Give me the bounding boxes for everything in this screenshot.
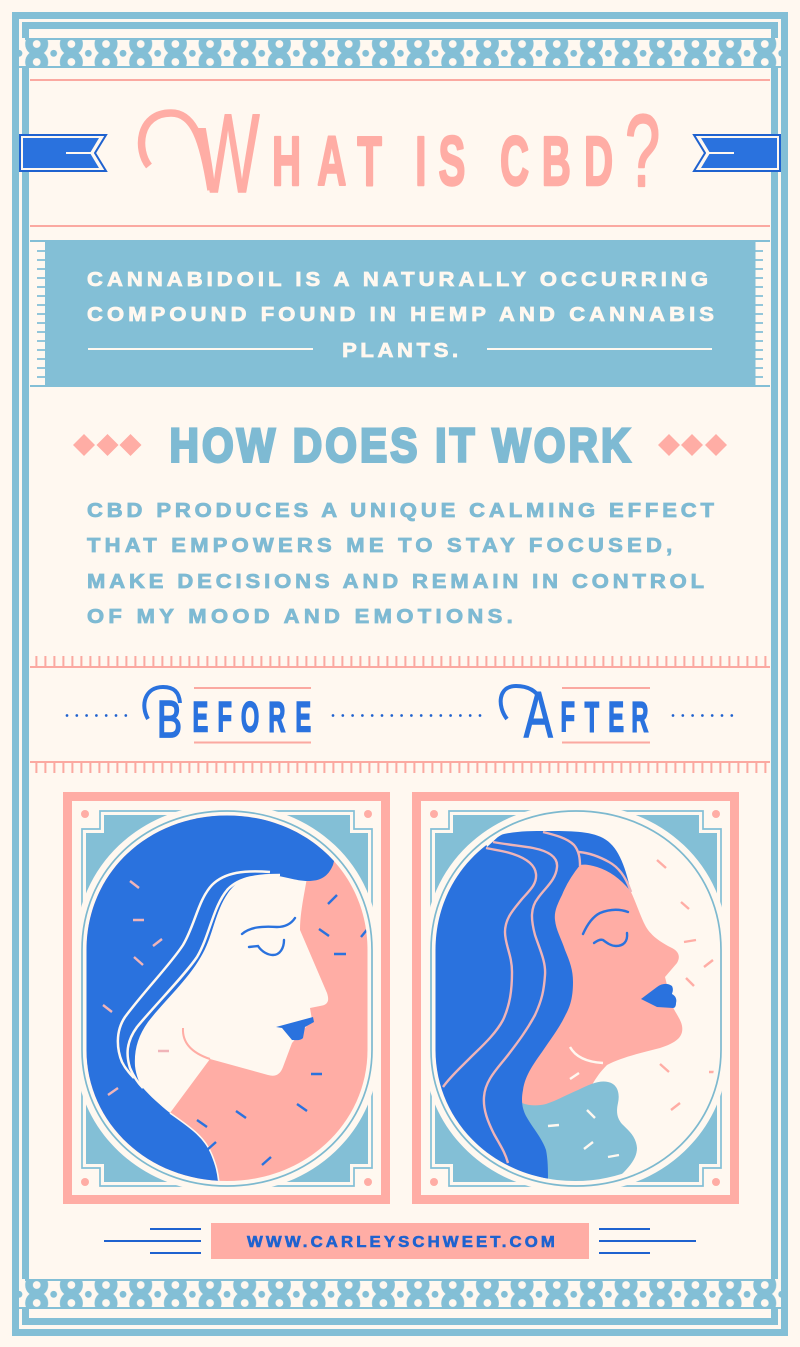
ribbon: left xyxy=(20,135,106,171)
definition text xyxy=(87,269,714,362)
definition text: PLANTS. xyxy=(342,340,458,362)
illustration: woman profile calm xyxy=(436,831,714,1181)
body text: CBD PRODUCES A UNIQUE CALMING EFFECT xyxy=(87,500,714,522)
heading: before: EFORE xyxy=(193,694,311,741)
definition text: CANNABIDOIL IS A NATURALLY OCCURRING xyxy=(87,269,708,291)
bottom patterned band xyxy=(19,1279,781,1309)
dotted lines xyxy=(67,714,734,717)
lines: left of url xyxy=(104,1229,201,1253)
diamonds: left xyxy=(73,434,142,456)
heading: before: B xyxy=(157,690,182,748)
body text: THAT EMPOWERS ME TO STAY FOCUSED, xyxy=(87,535,672,557)
title: ? xyxy=(625,93,660,208)
panel: after portrait xyxy=(412,792,739,1204)
heading: how does it work: HOW DOES IT WORK xyxy=(170,419,630,472)
diamonds: right xyxy=(658,434,727,456)
title rules xyxy=(30,79,770,227)
website url bar: WWW.CARLEYSCHWEET.COM xyxy=(247,1234,555,1251)
body text: OF MY MOOD AND EMOTIONS. xyxy=(87,606,513,628)
ticks: left of band xyxy=(30,242,45,385)
heading: before xyxy=(144,687,311,748)
heading: after: FTER xyxy=(560,694,648,741)
heading: after: A xyxy=(524,678,553,751)
panel: before portrait xyxy=(63,792,390,1204)
frame xyxy=(412,792,739,1204)
heading: after xyxy=(501,678,650,751)
tick strip: bottom xyxy=(30,761,770,768)
body text xyxy=(87,500,714,628)
ribbon: right xyxy=(694,135,780,171)
title: W xyxy=(196,90,260,216)
lines: right of url xyxy=(599,1229,696,1253)
definition text: COMPOUND FOUND IN HEMP AND CANNABIS xyxy=(87,304,714,326)
divider lines xyxy=(88,348,712,350)
top patterned band xyxy=(19,38,781,68)
body text: MAKE DECISIONS AND REMAIN IN CONTROL xyxy=(87,571,704,593)
tick strip: top xyxy=(30,661,770,668)
title: HAT IS CBD xyxy=(272,124,613,201)
panel: definition band xyxy=(30,240,770,387)
frame xyxy=(63,792,390,1204)
website url bar xyxy=(211,1223,589,1259)
title xyxy=(138,109,658,193)
illustration: woman profile tense xyxy=(86,816,368,1181)
ticks: right of band xyxy=(755,242,770,385)
